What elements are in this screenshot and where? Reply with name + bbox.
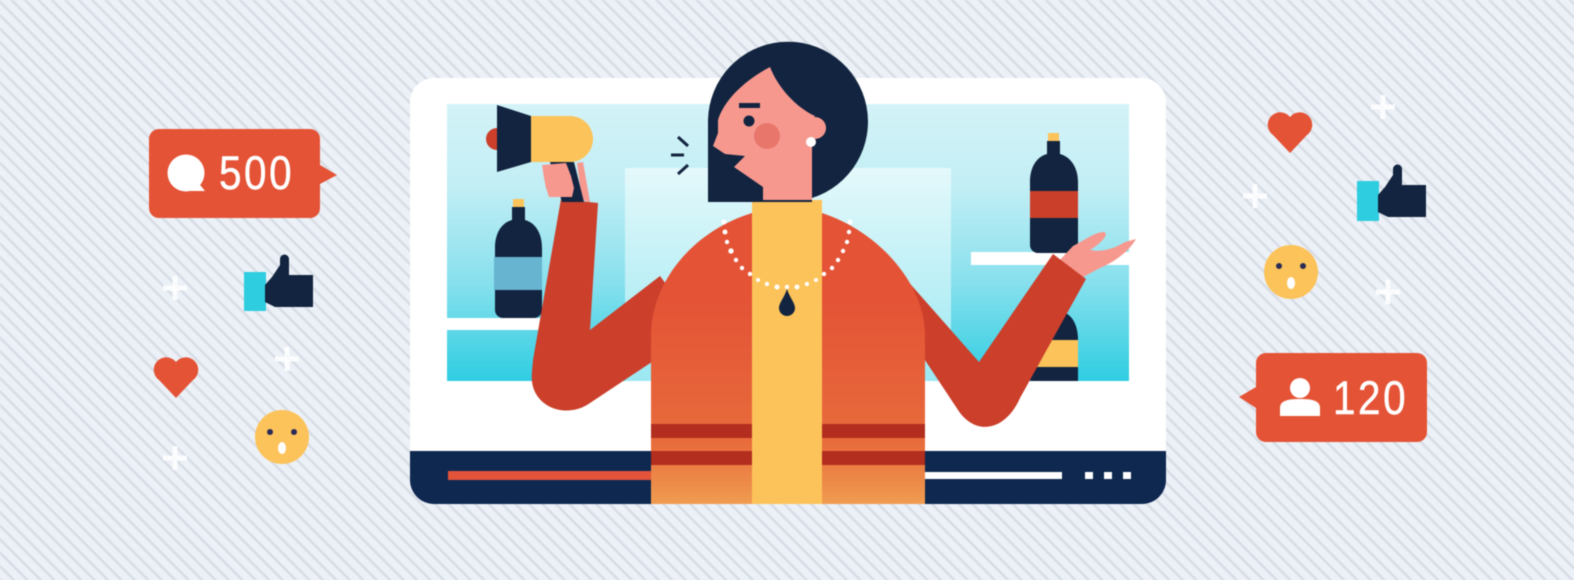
pendant (779, 289, 795, 316)
icon: heart left (154, 357, 198, 398)
icon: heart right (1268, 112, 1312, 153)
bottle: lower right (1030, 311, 1078, 381)
badge: followers 120 (1239, 353, 1427, 442)
megaphone (486, 105, 593, 202)
icon: thumbs up left (244, 254, 313, 311)
video screen scene (447, 104, 1129, 381)
sparkles right (1243, 95, 1400, 304)
icon: thumbs up right (1357, 164, 1426, 221)
icon: person (1280, 378, 1320, 416)
bottle: upper right (1030, 133, 1078, 253)
torso (651, 200, 925, 504)
sparkles left (163, 276, 299, 470)
earring (806, 137, 816, 147)
ear (804, 117, 826, 139)
person (486, 42, 1136, 504)
eye (744, 116, 754, 126)
bottle: left (494, 199, 542, 318)
badge: comments 500 (149, 129, 337, 218)
sound lines (671, 137, 688, 174)
comment count: 500 (219, 147, 294, 200)
right arm sleeve (905, 254, 1086, 427)
icon: surprised emoji left (255, 410, 309, 464)
eyebrow (739, 103, 760, 108)
follower count: 120 (1333, 372, 1408, 425)
hair (708, 42, 868, 202)
open hand (1058, 232, 1136, 277)
icon: speech bubble (168, 154, 205, 192)
player control bar (410, 451, 1166, 504)
left arm sleeve (532, 199, 700, 411)
face and neck (713, 67, 815, 200)
icon: surprised emoji right (1264, 245, 1318, 299)
video player frame (410, 78, 1166, 504)
blush (754, 123, 780, 149)
necklace (722, 220, 852, 290)
